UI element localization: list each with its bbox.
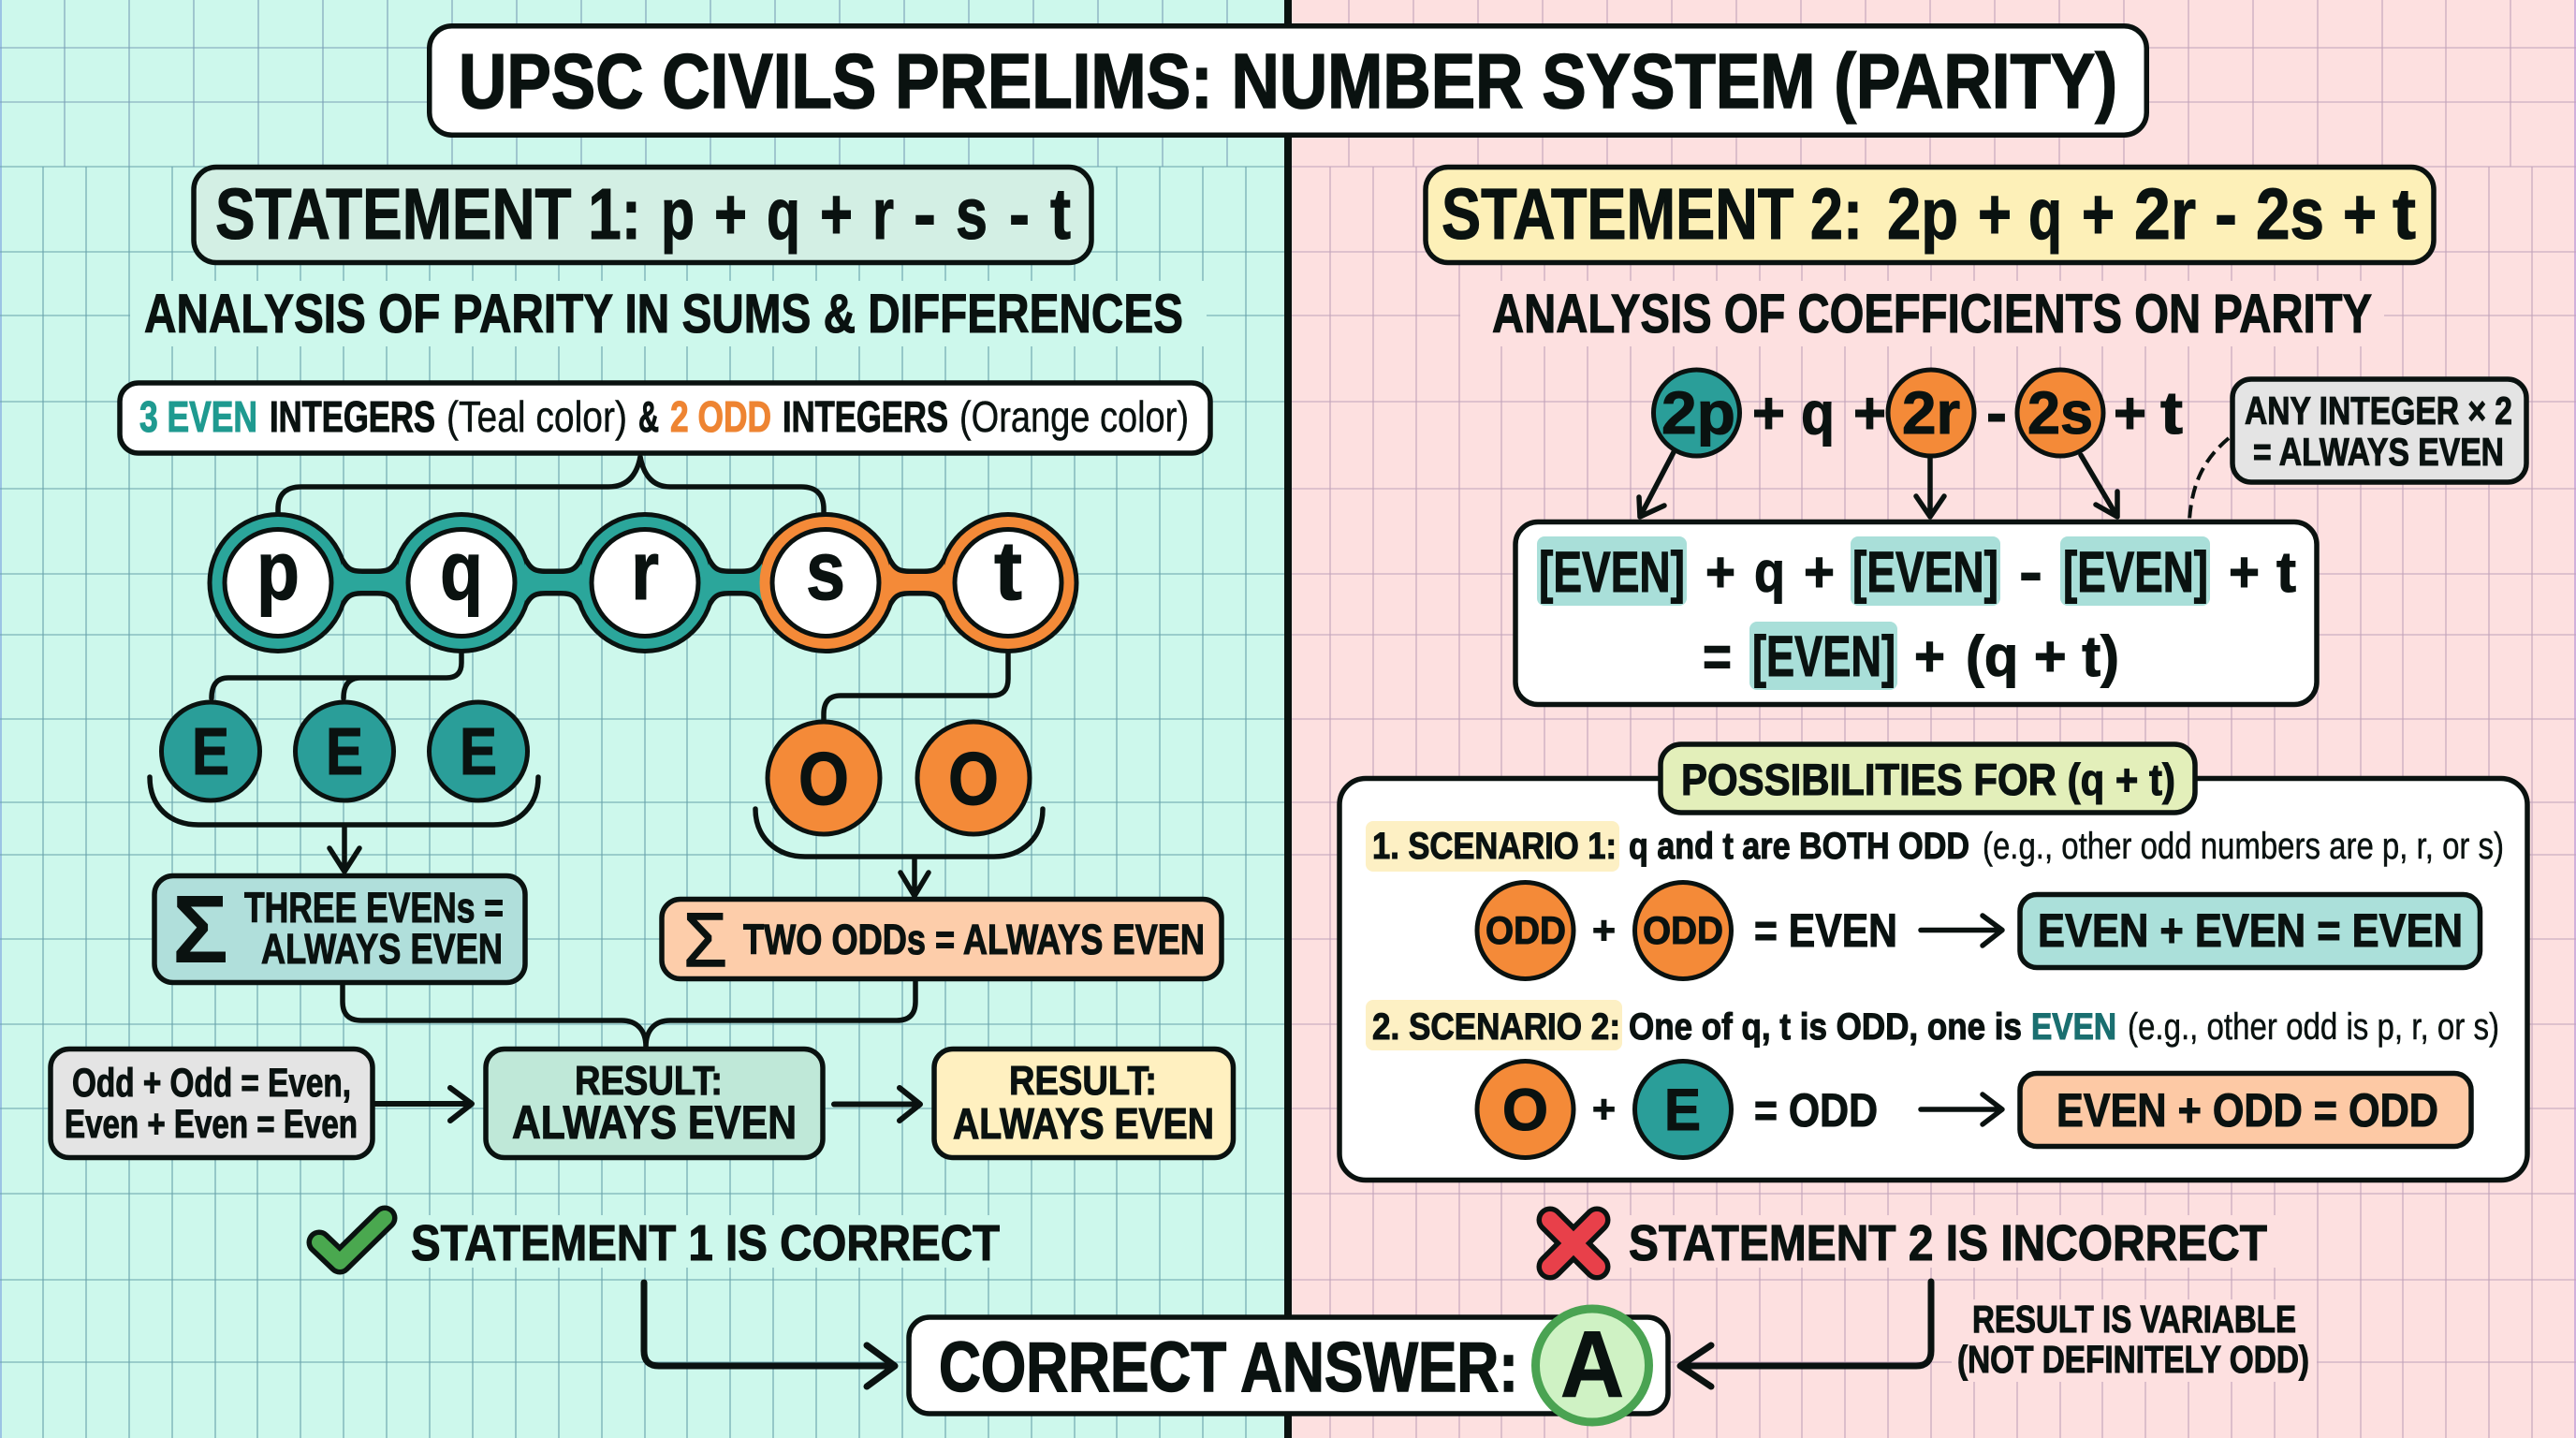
statement 2 heading xyxy=(1426,167,2434,262)
scenario 2 equation: E xyxy=(1664,1078,1701,1143)
statement 1 heading xyxy=(194,167,1091,262)
subtitle: parity in sums and differences: ANALYSIS OF PARITY IN SUMS & DIFFERENCES xyxy=(144,284,1183,345)
scenario 1 equation: = EVEN xyxy=(1754,904,1897,957)
statement 1 heading: STATEMENT 1: xyxy=(215,174,641,255)
verdict: statement 2 is incorrect: STATEMENT 2 IS INCORRECT xyxy=(1629,1215,2267,1271)
scenario 1 description: q and t are BOTH ODD xyxy=(1629,826,1969,867)
result box: always even: ALWAYS EVEN xyxy=(512,1096,797,1149)
odd circles O O: O xyxy=(798,737,849,820)
scenario 2 description: 2. SCENARIO 2: xyxy=(1372,1006,1620,1048)
expression box with even substitutions: [EVEN] xyxy=(1752,624,1895,688)
legend: even and odd integers: & xyxy=(638,392,659,441)
statement 2 heading: 2r xyxy=(2134,174,2196,255)
arrow: rule to result xyxy=(375,1088,472,1121)
sum box: two odds: TWO ODDs = ALWAYS EVEN xyxy=(743,916,1205,963)
statement 1 heading: - xyxy=(914,174,936,255)
scenario 1 description: 1. SCENARIO 1: xyxy=(1372,826,1617,867)
connector: t bead to odd circles xyxy=(824,653,1008,721)
connector: sums merge into result xyxy=(343,981,915,1047)
scenario 2 result: even + odd = odd xyxy=(2020,1073,2471,1146)
equation with highlighted terms: 2p xyxy=(1661,379,1735,447)
expression box with even substitutions: + xyxy=(1705,540,1735,604)
odd circles O O xyxy=(768,722,1030,834)
equation with highlighted terms: 2s xyxy=(2027,379,2093,447)
expression box with even substitutions: = xyxy=(1703,624,1732,688)
expression box with even substitutions: + xyxy=(1804,540,1835,604)
answer badge A xyxy=(1535,1309,1649,1422)
variable beads p q r s t xyxy=(208,512,1078,653)
scenario 1 equation: ODD xyxy=(1486,908,1566,952)
connector: q bead to even circles xyxy=(212,653,461,698)
scenario 1 result: even + even = even: EVEN + EVEN = EVEN xyxy=(2038,904,2463,957)
scenario 2 description: One of q, t is ODD, one is xyxy=(1629,1006,2022,1048)
arrow: statement 1 to answer xyxy=(644,1283,895,1387)
scenario 2 result: even + odd = odd: EVEN + ODD = ODD xyxy=(2056,1084,2438,1137)
scenario 2 equation: = ODD xyxy=(1754,1084,1878,1137)
panel: statement 1 analysis xyxy=(51,167,1234,1271)
scenario 1 result: even + even = even xyxy=(2020,895,2481,968)
title: UPSC CIVILS PRELIMS: NUMBER SYSTEM (PARITY) xyxy=(459,37,2117,125)
equation with highlighted terms: t xyxy=(2160,379,2183,447)
scenario 2 equation: O xyxy=(1502,1078,1548,1143)
icon: red cross xyxy=(1550,1220,1597,1267)
callout: any integer times 2: = ALWAYS EVEN xyxy=(2253,430,2504,474)
statement 1 heading: + xyxy=(820,174,853,255)
sum box: three evens: Σ xyxy=(172,875,228,983)
dashed leader: callout to expression xyxy=(2189,438,2229,520)
tag: possibilities heading: POSSIBILITIES FOR (q + t) xyxy=(1681,755,2175,804)
variable beads p q r s t: t xyxy=(994,523,1022,617)
sum box: three evens: ALWAYS EVEN xyxy=(261,925,503,973)
arrow: scenario 2 xyxy=(1921,1094,2002,1124)
expression box with even substitutions: [EVEN] xyxy=(1539,540,1685,604)
statement 2 heading: + xyxy=(2082,174,2115,255)
arrows: coefficients to expression xyxy=(1639,452,2117,517)
even circles E E E xyxy=(161,702,528,800)
callout: any integer times 2 xyxy=(2232,379,2526,482)
statement 1 heading: r xyxy=(872,174,894,255)
final result box: RESULT: xyxy=(1009,1058,1157,1104)
statement 2 heading: t xyxy=(2393,174,2416,255)
result box: always even: RESULT: xyxy=(575,1058,723,1104)
rule box: odd plus odd: Even + Even = Even xyxy=(65,1102,358,1147)
legend: even and odd integers: 2 ODD xyxy=(670,392,771,441)
scenario 2 equation xyxy=(1477,1062,1878,1157)
final result box: ALWAYS EVEN xyxy=(953,1099,1214,1148)
statement 1 heading: s xyxy=(956,174,988,255)
variable beads p q r s t: q xyxy=(440,523,483,617)
legend: even and odd integers: (Teal color) xyxy=(446,392,627,441)
sum box: three evens: THREE EVENs = xyxy=(244,884,504,932)
connector: legend to beads xyxy=(278,457,824,512)
scenario 2 description: (e.g., other odd is p, r, or s) xyxy=(2128,1006,2499,1048)
expression box with even substitutions: t xyxy=(2276,540,2296,604)
statement 2 heading: STATEMENT 2: xyxy=(1442,174,1863,255)
rule box: odd plus odd xyxy=(51,1049,373,1157)
variable beads p q r s t: s xyxy=(806,523,845,617)
callout: any integer times 2: ANY INTEGER × 2 xyxy=(2245,389,2512,433)
expression box with even substitutions: [EVEN] xyxy=(2063,540,2208,604)
even circles E E E: E xyxy=(192,715,229,789)
note: result is variable: (NOT DEFINITELY ODD) xyxy=(1957,1338,2309,1381)
statement 2 heading: - xyxy=(2215,174,2237,255)
equation with highlighted terms: 2r xyxy=(1902,379,1960,447)
scenario 1 equation: + xyxy=(1592,908,1616,952)
panel: possibilities for q + t xyxy=(1339,744,2527,1180)
statement 2 heading: + xyxy=(2343,174,2377,255)
expression box with even substitutions: + xyxy=(1914,624,1945,688)
expression box with even substitutions: (q + t) xyxy=(1966,624,2119,688)
equation with highlighted terms: q xyxy=(1801,379,1835,447)
note: result is variable: RESULT IS VARIABLE xyxy=(1972,1298,2296,1341)
equation with highlighted terms: + xyxy=(1752,379,1785,447)
arrow: result to final result xyxy=(834,1088,920,1121)
icon: green check mark xyxy=(319,1218,385,1262)
expression box with even substitutions: q xyxy=(1754,540,1785,604)
legend: even and odd integers: INTEGERS xyxy=(270,392,435,441)
expression box with even substitutions: [EVEN] xyxy=(1852,540,1998,604)
sum box: two odds xyxy=(662,898,1222,983)
expression box with even substitutions xyxy=(1515,522,2317,704)
note: result is variable xyxy=(1957,1298,2309,1381)
expression box with even substitutions: + xyxy=(2229,540,2260,604)
statement 2 heading: + xyxy=(1978,174,2012,255)
expression box with even substitutions: - xyxy=(2019,540,2042,604)
verdict: statement 1 is correct: STATEMENT 1 IS CORRECT xyxy=(411,1215,1000,1271)
statement 2 heading: 2s xyxy=(2256,174,2324,255)
legend: even and odd integers: (Orange color) xyxy=(959,392,1189,441)
result box: always even xyxy=(486,1049,823,1157)
scenario 1 equation: ODD xyxy=(1643,908,1723,952)
even circles E E E: E xyxy=(460,715,497,789)
variable beads p q r s t: p xyxy=(256,523,300,617)
bracket and arrow: evens to sum xyxy=(150,777,538,872)
legend: even and odd integers: 3 EVEN xyxy=(139,392,257,441)
sum box: two odds: Σ xyxy=(683,898,727,983)
correct answer box: CORRECT ANSWER: xyxy=(939,1328,1518,1406)
arrow: scenario 1 xyxy=(1921,916,2002,946)
subtitle: coefficients on parity: ANALYSIS OF COEFFICIENTS ON PARITY xyxy=(1492,284,2372,345)
bracket and arrow: odds to sum xyxy=(755,809,1043,896)
statement 1 heading: t xyxy=(1050,174,1071,255)
scenario 2 description: EVEN xyxy=(2031,1006,2116,1048)
equation with highlighted terms: + xyxy=(2114,379,2146,447)
correct answer box xyxy=(909,1309,1668,1422)
answer badge A: A xyxy=(1560,1313,1624,1417)
equation with highlighted terms xyxy=(1653,370,2183,456)
scenario 2 description xyxy=(1366,1000,2499,1050)
variable beads p q r s t: r xyxy=(631,523,659,617)
even circles E E E: E xyxy=(326,715,363,789)
legend: even and odd integers: INTEGERS xyxy=(783,392,948,441)
statement 1 heading: q xyxy=(767,174,800,255)
arrow: statement 2 to answer xyxy=(1680,1282,1931,1387)
statement 2 heading: 2p xyxy=(1887,174,1958,255)
scenario 2 equation: + xyxy=(1592,1087,1616,1131)
tag: possibilities heading xyxy=(1661,744,2195,813)
statement 1 heading: - xyxy=(1009,174,1030,255)
scenario 1 equation xyxy=(1477,882,1897,979)
legend: even and odd integers xyxy=(120,383,1210,453)
statement 2 heading: q xyxy=(2028,174,2062,255)
statement 1 heading: + xyxy=(714,174,747,255)
final result box xyxy=(934,1049,1234,1157)
odd circles O O: O xyxy=(948,737,999,820)
equation with highlighted terms: - xyxy=(1986,379,2007,447)
rule box: odd plus odd: Odd + Odd = Even, xyxy=(72,1061,351,1106)
center divider xyxy=(1284,0,1292,1438)
panel: statement 2 analysis xyxy=(1339,167,2527,1381)
equation with highlighted terms: + xyxy=(1853,379,1886,447)
sum box: three evens xyxy=(154,875,525,983)
scenario 1 description xyxy=(1366,821,2504,872)
statement 1 heading: p xyxy=(661,174,695,255)
